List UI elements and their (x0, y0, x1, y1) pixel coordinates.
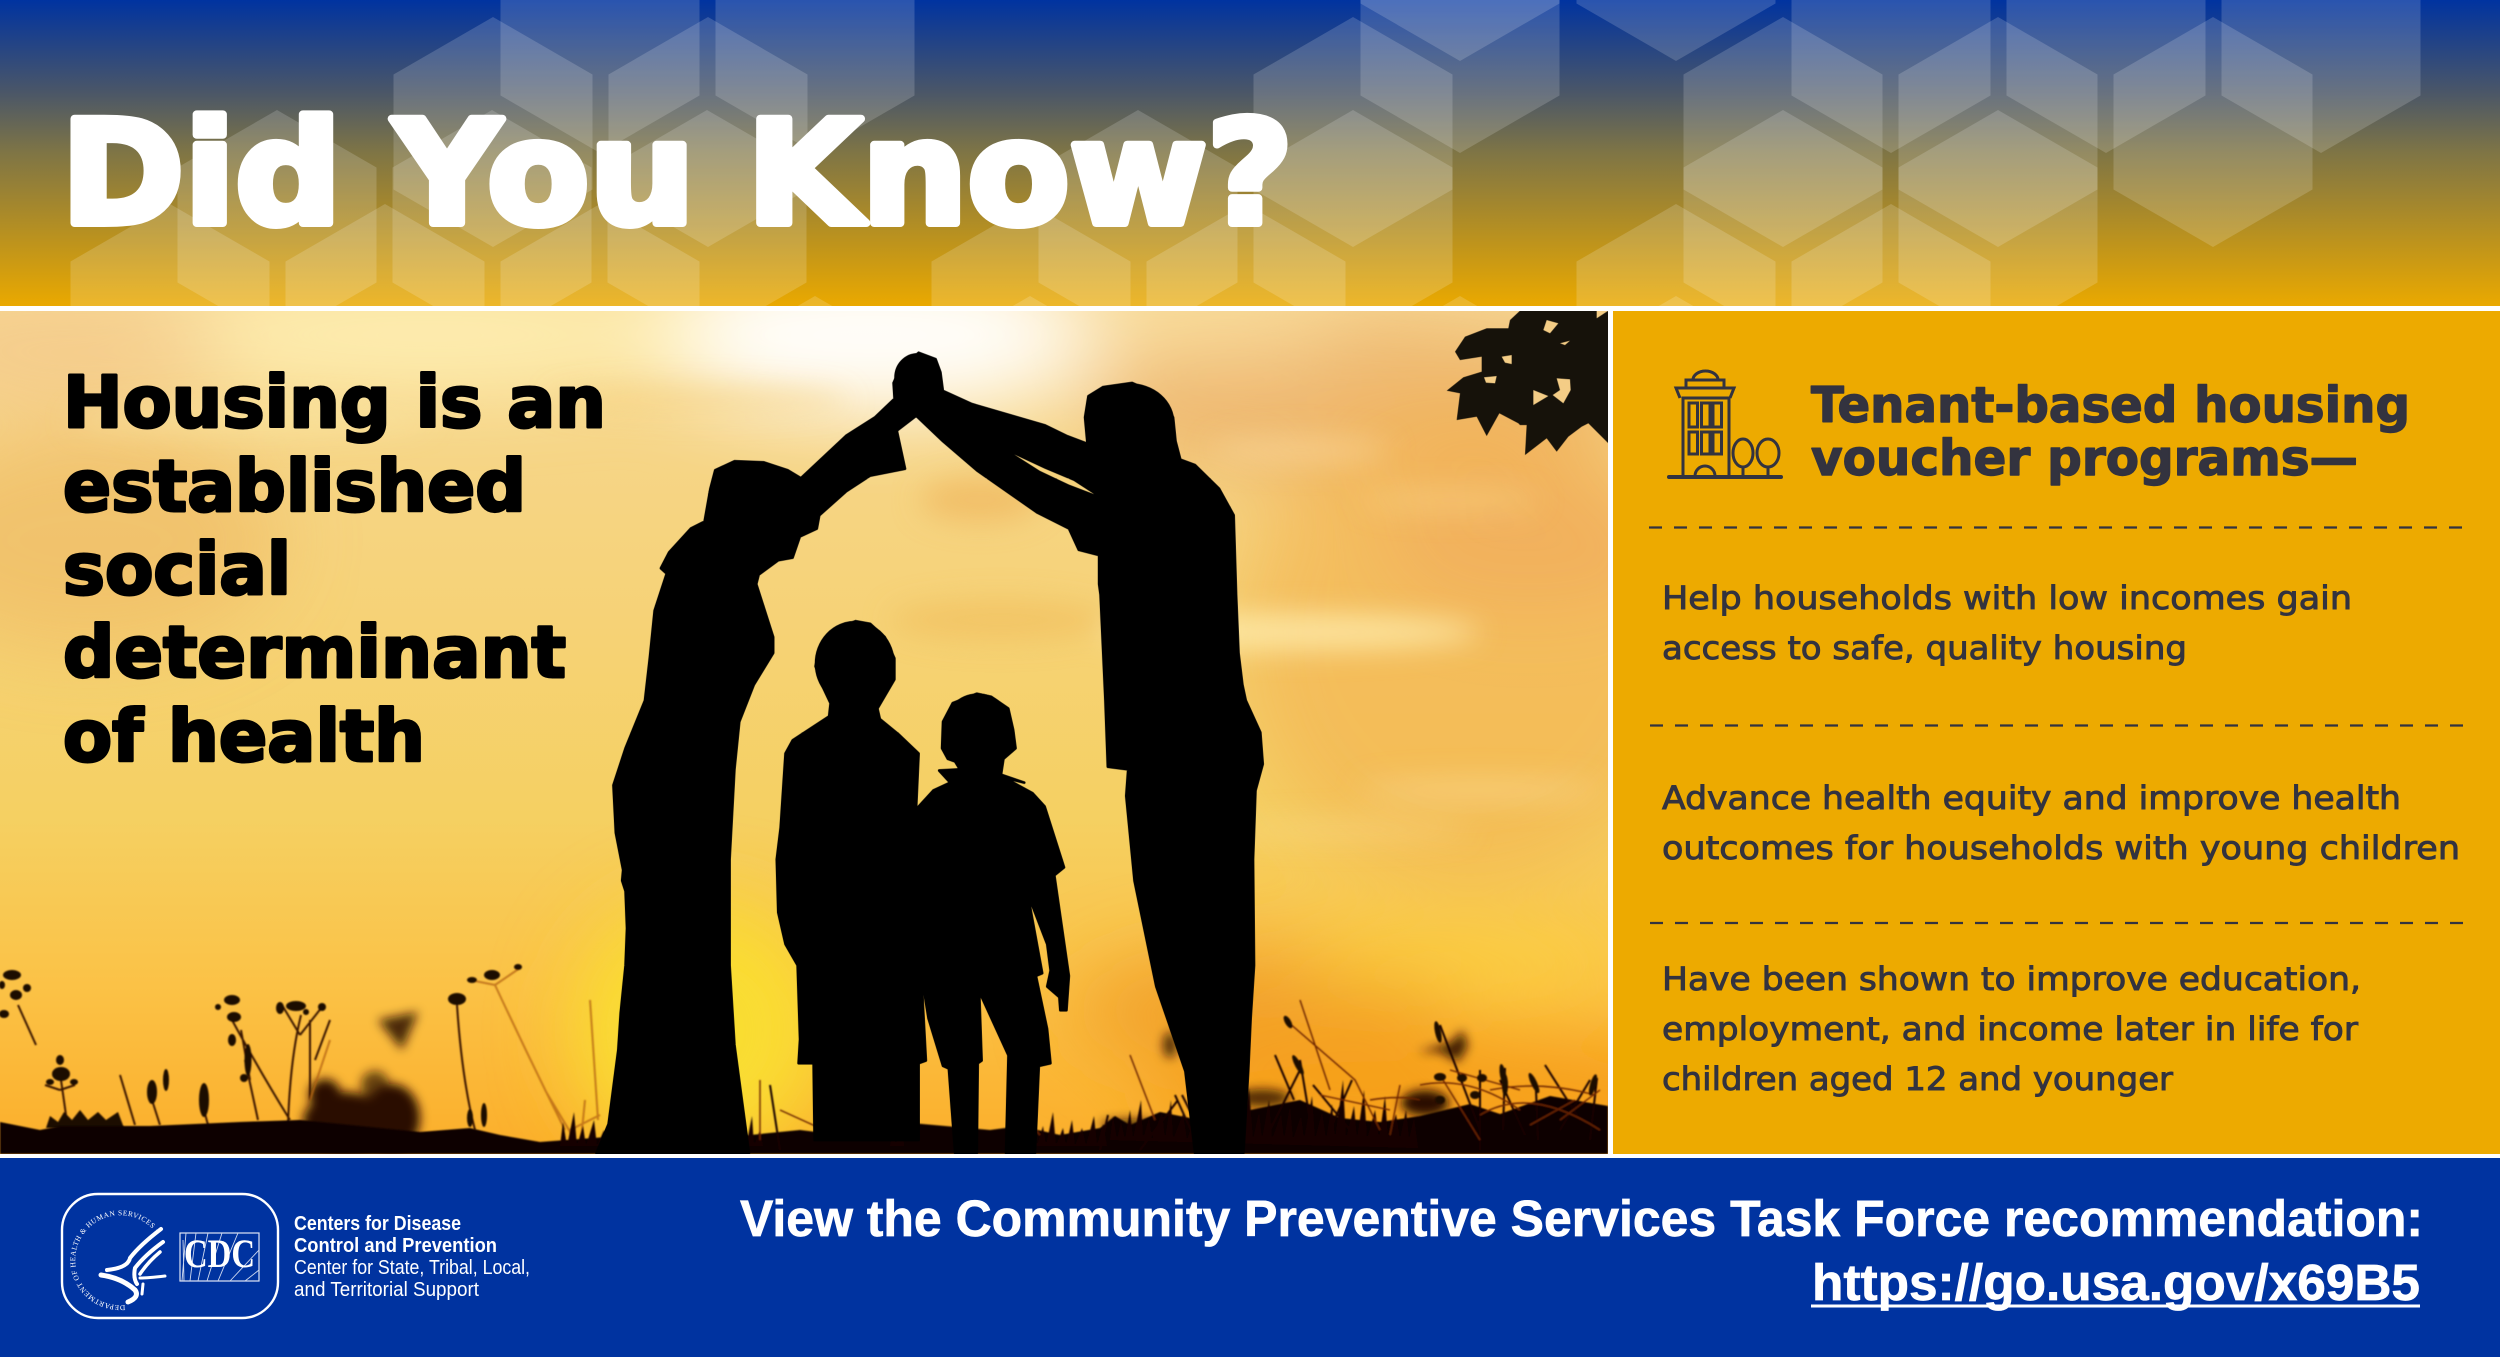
sky clouds and glow (0, 311, 1608, 1137)
benefit: health equity: Advance health equity and improve health (1662, 779, 2401, 817)
heading: housing statement: of health (63, 695, 425, 778)
benefit: access to housing: access to safe, quality housing (1662, 629, 2187, 667)
agency name: Control and Prevention (294, 1235, 497, 1257)
agency name (294, 1213, 530, 1301)
title: Did You Know? (61, 90, 1293, 257)
honeycomb hexagon pattern (70, 0, 2420, 306)
subheading: voucher programs— (1811, 430, 2358, 487)
subheading (1811, 377, 2410, 487)
benefit: later life outcomes: Have been shown to improve education, (1662, 960, 2361, 998)
tree leaves (1447, 311, 1608, 455)
benefit: later life outcomes: children aged 12 and younger (1662, 1060, 2174, 1098)
agency name: Center for State, Tribal, Local, (294, 1257, 530, 1279)
heading: housing statement: determinant (63, 611, 566, 694)
parents silhouette with joined hands (596, 353, 1263, 1153)
benefit: access to housing (1662, 579, 2352, 667)
icon: apartment building and trees (1669, 371, 1781, 477)
benefit: later life outcomes (1662, 960, 2361, 1098)
icon: HHS eagle seal (70, 1192, 166, 1310)
heading: housing statement: social (63, 528, 291, 611)
call to action link: https://go.usa.gov/x69B5 (1812, 1254, 2420, 1311)
benefit: health equity (1662, 779, 2460, 867)
logo badge: HHS and CDC (60, 1192, 280, 1320)
call to action link: View the Community Preventive Services Task Force recommendation: (740, 1190, 2423, 1247)
panel: tenant-based housing voucher programs (1613, 311, 2500, 1154)
heading: housing statement: established (63, 445, 526, 528)
panel: sunset photo (0, 311, 1608, 1154)
heading: housing statement (63, 361, 606, 778)
grass spikes (1110, 1080, 1418, 1148)
benefit: later life outcomes: employment, and income later in life for (1662, 1010, 2359, 1048)
subheading: Tenant-based housing (1811, 377, 2410, 434)
field grass: left flowers (0, 964, 600, 1150)
blurred foreground bushes (303, 1012, 1468, 1152)
call to action link (740, 1190, 2423, 1311)
agency name: Centers for Disease (294, 1213, 461, 1235)
benefit: health equity: outcomes for households with young children (1662, 829, 2460, 867)
heading: housing statement: Housing is an (63, 361, 606, 444)
icon: CDC mark: CDC (184, 1231, 255, 1276)
icon: HHS eagle seal: DEPARTMENT OF HEALTH & HUMAN SERVICES · USA (70, 1210, 157, 1310)
header banner (0, 0, 2500, 306)
children silhouettes (777, 621, 1069, 1153)
agency name: and Territorial Support (294, 1279, 479, 1301)
horizon ground and grass (0, 1000, 1608, 1154)
benefit: access to housing: Help households with low incomes gain (1662, 579, 2352, 617)
